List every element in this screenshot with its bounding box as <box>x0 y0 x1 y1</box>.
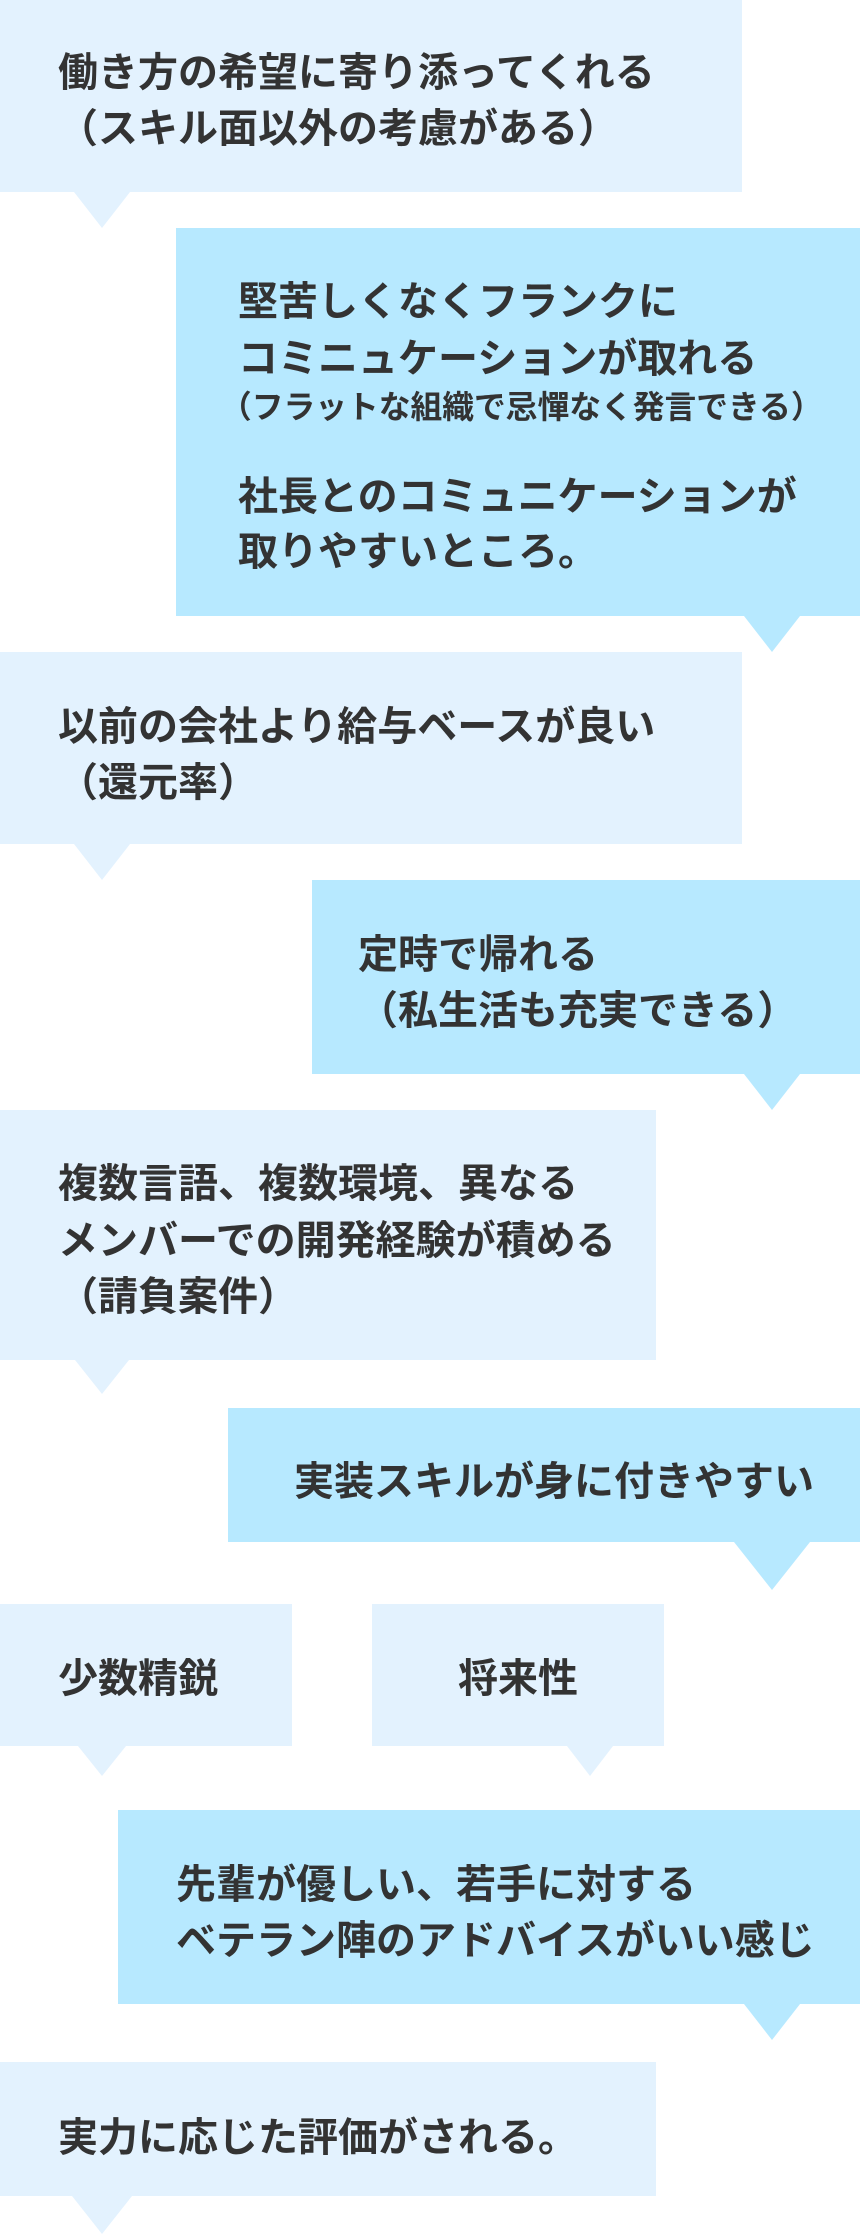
text: president line 2: 取りやすいところ。 <box>238 530 598 574</box>
bubble: implementation skill <box>228 1408 860 1590</box>
text: frank line 2: コミニュケーションが取れる <box>238 337 757 381</box>
text: private life: （私生活も充実できる） <box>358 989 797 1033</box>
bubble: multiple languages <box>0 1110 656 1394</box>
text: work style wishes: 働き方の希望に寄り添ってくれる <box>58 51 655 95</box>
text: return rate: （還元率） <box>58 761 258 805</box>
bubble: frank communication <box>176 228 860 652</box>
text: implementation skill: 実装スキルが身に付きやすい <box>294 1460 814 1504</box>
text: beyond skills: （スキル面以外の考慮がある） <box>58 107 618 151</box>
text: small elite team: 少数精鋭 <box>58 1657 218 1701</box>
text: leave on time: 定時で帰れる <box>358 933 598 977</box>
text: frank line 1: 堅苦しくなくフランクに <box>238 280 678 324</box>
text: languages line 1: 複数言語、複数環境、異なる <box>58 1162 578 1206</box>
text: future prospects: 将来性 <box>458 1657 578 1701</box>
bubble: kind seniors <box>118 1810 860 2040</box>
text: contract projects: （請負案件） <box>58 1275 298 1319</box>
bubble: fair evaluation <box>0 2062 656 2234</box>
text: fair evaluation: 実力に応じた評価がされる。 <box>58 2116 578 2160</box>
text: president line 1: 社長とのコミュニケーションが <box>238 475 797 519</box>
text: kind seniors line 1: 先輩が優しい、若手に対する <box>176 1863 696 1907</box>
bubble: salary base <box>0 652 742 880</box>
text: languages line 2: メンバーでの開発経験が積める <box>58 1219 616 1263</box>
text: flat organization note: （フラットな組織で忌憚なく発言できる） <box>220 389 823 425</box>
bubble: leave on time <box>312 880 860 1110</box>
text: salary line: 以前の会社より給与ベースが良い <box>58 705 655 749</box>
text: kind seniors line 2: ベテラン陣のアドバイスがいい感じ <box>176 1919 815 1963</box>
bubble: work style wishes <box>0 0 742 228</box>
bubble: future prospects <box>372 1604 664 1776</box>
bubble: small elite team <box>0 1604 292 1776</box>
